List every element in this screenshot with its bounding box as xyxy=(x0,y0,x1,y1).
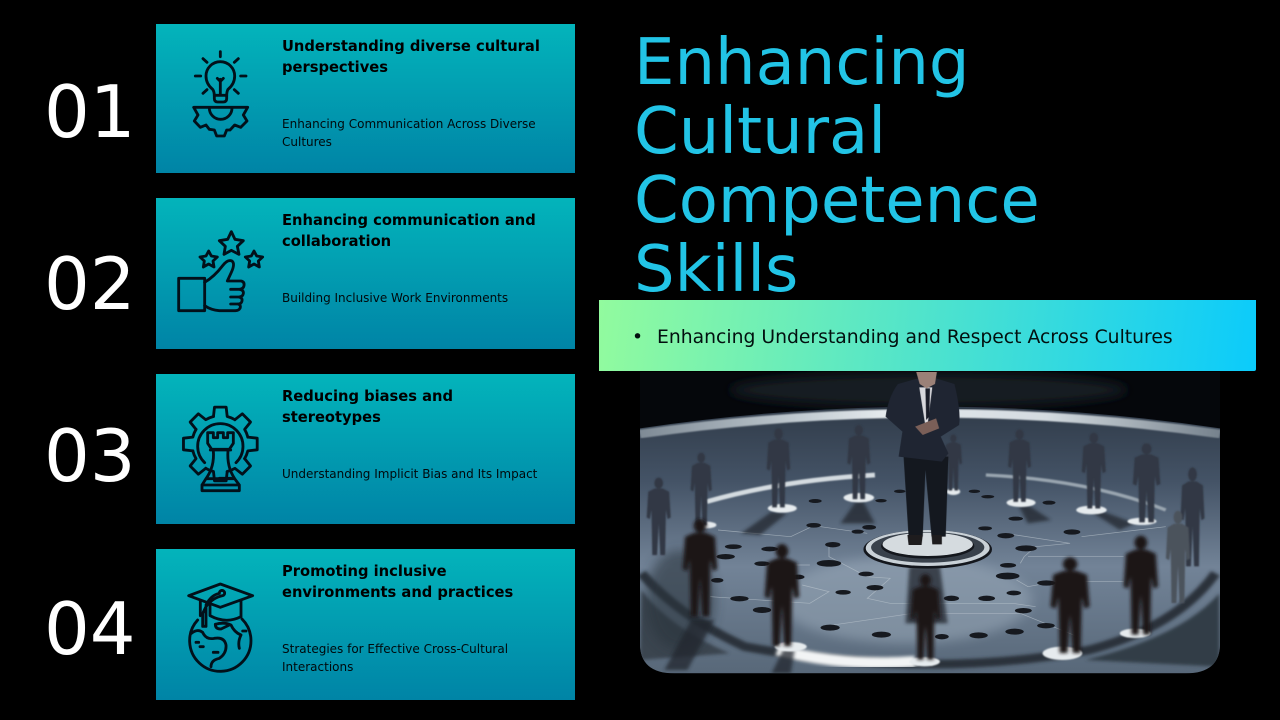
bullet banner xyxy=(599,300,1256,371)
number 03: 03 xyxy=(44,414,136,498)
heading: Reducing biases and xyxy=(282,388,453,405)
background figurines xyxy=(647,425,1205,603)
description xyxy=(282,117,536,149)
heading xyxy=(282,388,453,426)
title: Competence xyxy=(634,164,1040,238)
photo: businessman among figurines on a circuit disc xyxy=(640,371,1220,674)
photo backdrop xyxy=(640,372,1220,428)
number 02: 02 xyxy=(44,242,136,326)
figurine bases and shadows xyxy=(664,488,1157,673)
heading: environments and practices xyxy=(282,584,513,601)
heading: stereotypes xyxy=(282,409,381,426)
description: Understanding Implicit Bias and Its Impact xyxy=(282,467,537,481)
icon: thumbs up with stars xyxy=(177,230,264,312)
bullet text: Enhancing Understanding and Respect Across Cultures xyxy=(657,327,1173,348)
central target platform xyxy=(863,530,992,569)
title: Skills xyxy=(634,233,798,307)
icon: chess rook in gear xyxy=(182,406,259,492)
heading xyxy=(282,38,540,76)
heading: perspectives xyxy=(282,59,388,76)
bullet: • xyxy=(632,327,643,348)
description: Cultures xyxy=(282,135,332,149)
panel: card 3 xyxy=(156,374,575,524)
number 01: 01 xyxy=(44,70,136,154)
title xyxy=(634,26,1040,307)
description: Building Inclusive Work Environments xyxy=(282,291,508,305)
description: Interactions xyxy=(282,660,353,674)
icon: graduation cap on globe xyxy=(187,582,254,673)
circuit lines xyxy=(710,526,1166,637)
central businessman xyxy=(886,372,960,545)
panel: card 1 xyxy=(156,24,575,173)
panel: card 2 xyxy=(156,198,575,349)
heading: collaboration xyxy=(282,233,391,250)
heading xyxy=(282,212,536,250)
heading: Enhancing communication and xyxy=(282,212,536,229)
panel: card 4 xyxy=(156,549,575,700)
title: Cultural xyxy=(634,95,886,169)
number 04: 04 xyxy=(44,587,136,671)
heading: Promoting inclusive xyxy=(282,563,447,580)
foreground silhouettes xyxy=(683,519,1158,660)
heading: Understanding diverse cultural xyxy=(282,38,540,55)
floor dots xyxy=(711,490,1080,639)
title: Enhancing xyxy=(634,26,970,100)
disc xyxy=(640,373,1220,673)
description: Strategies for Effective Cross-Cultural xyxy=(282,642,508,656)
icon: light bulb over gear xyxy=(192,50,250,138)
description xyxy=(282,642,508,674)
heading xyxy=(282,563,513,601)
description: Enhancing Communication Across Diverse xyxy=(282,117,536,131)
